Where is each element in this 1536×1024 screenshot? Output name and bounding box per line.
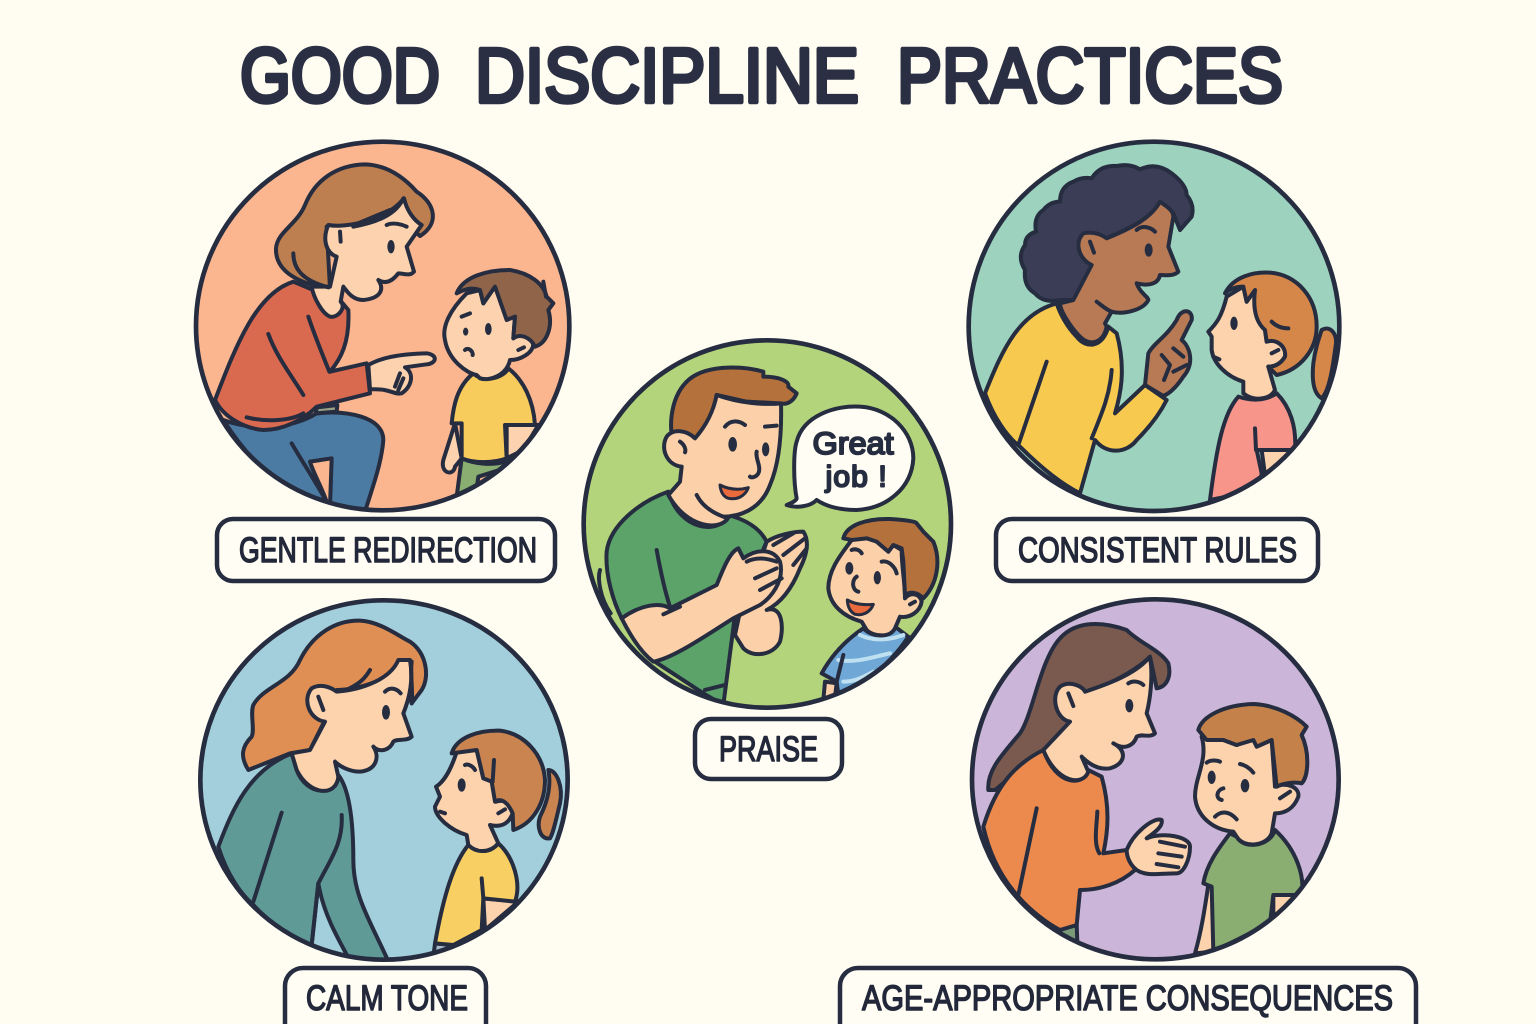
panel: gentle redirection illustration: [196, 142, 569, 517]
woman pointing: [215, 164, 435, 517]
panel: calm tone illustration: [200, 600, 568, 967]
woman with open hand: [983, 624, 1190, 942]
label: age-appropriate consequences: [840, 968, 1416, 1024]
label: praise: [695, 719, 842, 779]
panel: praise illustration: [584, 340, 951, 708]
label: calm tone: CALM TONE: [306, 979, 468, 1018]
speech bubble: [787, 406, 913, 510]
panel: age-appropriate consequences illustration: [972, 599, 1339, 959]
label: consistent rules: [996, 519, 1318, 581]
speech bubble: Great: [813, 426, 894, 461]
girl looking up: [433, 731, 561, 957]
title: GOOD: [240, 33, 440, 119]
woman raising finger: [985, 165, 1193, 493]
panel: consistent rules illustration: [969, 142, 1339, 511]
label: praise: PRAISE: [719, 730, 818, 769]
boy smiling: [822, 519, 937, 700]
title: DISCIPLINE: [475, 33, 859, 119]
title: [240, 33, 1283, 119]
label: age-appropriate consequences: AGE-APPROPRIATE CONSEQUENCES: [862, 979, 1393, 1018]
speech bubble: job !: [825, 460, 887, 493]
label: consistent rules: CONSISTENT RULES: [1018, 531, 1297, 570]
girl with ponytail: [1208, 273, 1336, 500]
title: PRACTICES: [897, 33, 1283, 119]
label: calm tone: [285, 968, 486, 1024]
label: gentle redirection: [217, 519, 555, 581]
sad boy: [1195, 704, 1307, 953]
father clapping: [599, 368, 807, 705]
woman leaning: [218, 621, 426, 967]
label: gentle redirection: GENTLE REDIRECTION: [239, 531, 537, 570]
boy looking up: [443, 270, 553, 497]
